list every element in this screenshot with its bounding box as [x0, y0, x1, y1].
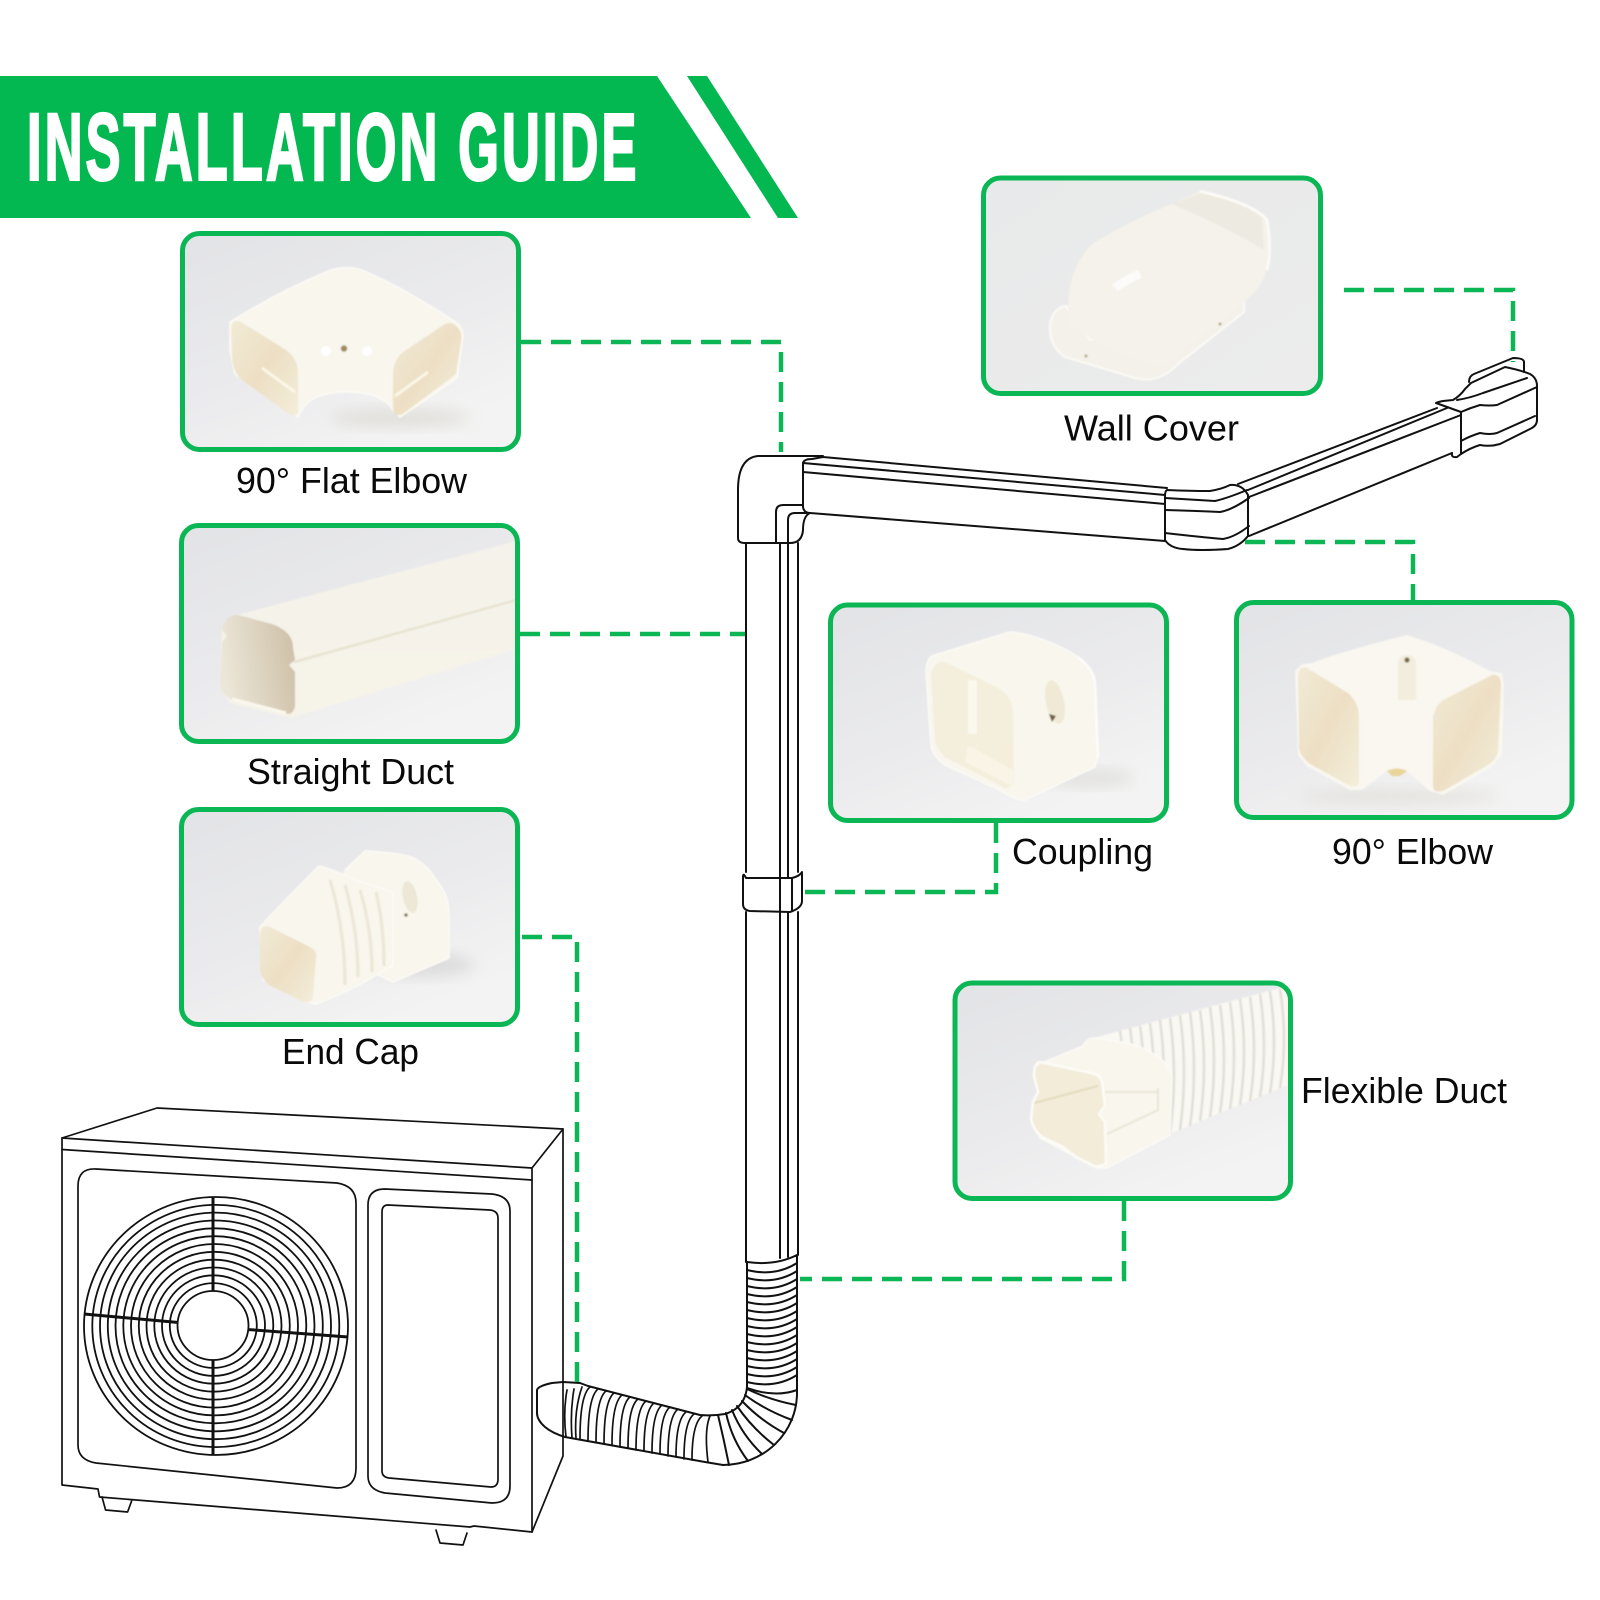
connector: straight duct	[520, 632, 745, 636]
wall cover fitting	[1436, 358, 1537, 457]
connector: coupling	[803, 823, 996, 892]
right foot	[436, 1530, 467, 1545]
flat elbow fitting	[738, 456, 823, 543]
label: end cap: End Cap	[282, 1031, 419, 1072]
label: flexible duct: Flexible Duct	[1301, 1070, 1507, 1111]
panel: coupling	[830, 605, 1166, 820]
side panel outer	[368, 1189, 510, 1503]
label: straight duct: Straight Duct	[247, 751, 454, 792]
duct run: angled duct	[1238, 408, 1461, 536]
duct run: 90 degree corner fitting	[1165, 485, 1249, 550]
panel: 90 degree elbow	[1236, 602, 1572, 818]
panel: 90 degree flat elbow	[182, 234, 518, 450]
panel: end cap	[182, 810, 518, 1024]
panel: straight duct	[182, 526, 520, 742]
panel: wall cover	[984, 178, 1320, 394]
connector: 90 degree elbow	[1245, 542, 1413, 600]
side panel inner	[382, 1205, 498, 1487]
panel: flexible duct	[955, 983, 1295, 1198]
flexible duct with ribs	[537, 1255, 797, 1465]
label: 90 degree flat elbow: 90° Flat Elbow	[236, 460, 468, 501]
flexible duct outline	[537, 1255, 797, 1465]
label: coupling: Coupling	[1012, 831, 1153, 872]
connector: end cap	[522, 937, 577, 1382]
title banner	[0, 76, 798, 218]
duct run: upper horizontal duct	[803, 457, 1167, 541]
connector: flexible duct	[800, 1201, 1124, 1279]
fan panel	[78, 1169, 356, 1488]
label: 90 degree elbow: 90° Elbow	[1332, 831, 1494, 872]
label: wall cover: Wall Cover	[1064, 408, 1239, 448]
heading: INSTALLATION GUIDE	[27, 95, 636, 201]
connector: flat elbow	[521, 342, 781, 452]
outdoor AC unit	[62, 1108, 563, 1545]
left foot	[102, 1497, 132, 1512]
coupling fitting	[743, 872, 802, 912]
connector: wall cover	[1344, 290, 1513, 362]
duct run: elbow and vertical straight duct	[738, 456, 823, 1262]
fan grille	[84, 1197, 348, 1455]
